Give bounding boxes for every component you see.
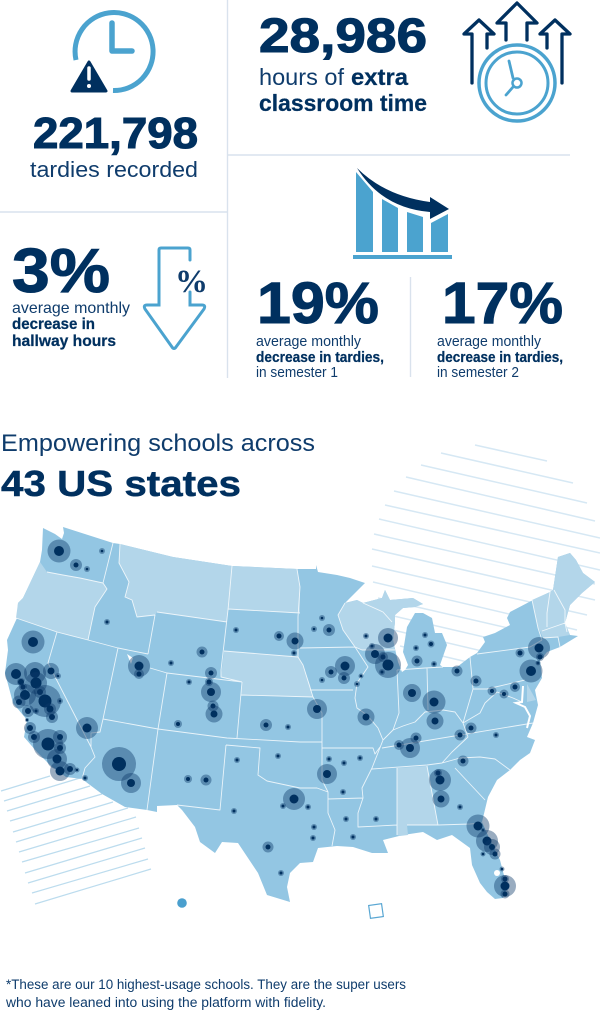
stat: 19% semester 1: average monthly <box>256 334 362 350</box>
icon: down arrow with percent <box>144 248 208 348</box>
icon: clock with rising arrows <box>464 3 570 121</box>
panel: decrease in tardies <box>256 168 563 381</box>
stat: 17% semester 2: average monthly <box>437 334 542 350</box>
number: 3%: 3% <box>12 237 110 306</box>
label: average monthly decrease in hallway hours: decrease in <box>12 316 95 333</box>
stat: 19% semester 1 <box>256 271 384 381</box>
decorative dot <box>177 898 187 908</box>
stat: 17% semester 2 <box>437 271 563 381</box>
label: average monthly decrease in hallway hours <box>12 300 130 350</box>
heading: Empowering schools across 43 US states: Empowering schools across <box>1 430 315 457</box>
heading: Empowering schools across 43 US states <box>1 430 315 504</box>
label: hours of extra classroom time: extra <box>351 64 408 90</box>
label: hours of extra classroom time <box>259 64 427 116</box>
map: school markers <box>5 540 550 898</box>
stat: 17% semester 2: decrease in tardies, <box>437 350 563 366</box>
footnote <box>5 977 406 1010</box>
label: tardies recorded: tardies recorded <box>30 157 198 182</box>
label: average monthly decrease in hallway hours: hallway hours <box>12 333 116 350</box>
footnote: *These are our 10 highest-usage schools. They are the super users <box>6 977 406 992</box>
label: hours of extra classroom time: classroom time <box>259 90 427 116</box>
stat: 19% semester 1: 19% <box>257 271 379 336</box>
stat: 17% semester 2: 17% <box>442 271 563 336</box>
icon: down arrow with percent: % <box>175 264 208 300</box>
panel: US map <box>1 445 600 918</box>
footnote: who have leaned into using the platform with fidelity. <box>5 995 326 1010</box>
icon: declining bar chart <box>353 168 452 259</box>
icon: clock with warning <box>72 13 153 91</box>
number: 28,986: 28,986 <box>259 10 427 63</box>
stat: 19% semester 1: decrease in tardies, <box>256 350 384 366</box>
decorative square <box>369 904 383 918</box>
stat: 19% semester 1: in semester 1 <box>256 365 338 381</box>
panel: extra classroom time <box>259 3 570 121</box>
label: hours of extra classroom time: hours of <box>259 64 345 90</box>
panel: tardies recorded <box>30 13 198 182</box>
panel: hallway hours <box>12 237 208 350</box>
stat: 17% semester 2: in semester 2 <box>437 365 519 381</box>
map: states <box>5 527 595 902</box>
number: 221,798: 221,798 <box>33 109 198 158</box>
label: average monthly decrease in hallway hours: average monthly <box>12 300 130 317</box>
heading: Empowering schools across 43 US states: 43 US states <box>1 463 241 504</box>
